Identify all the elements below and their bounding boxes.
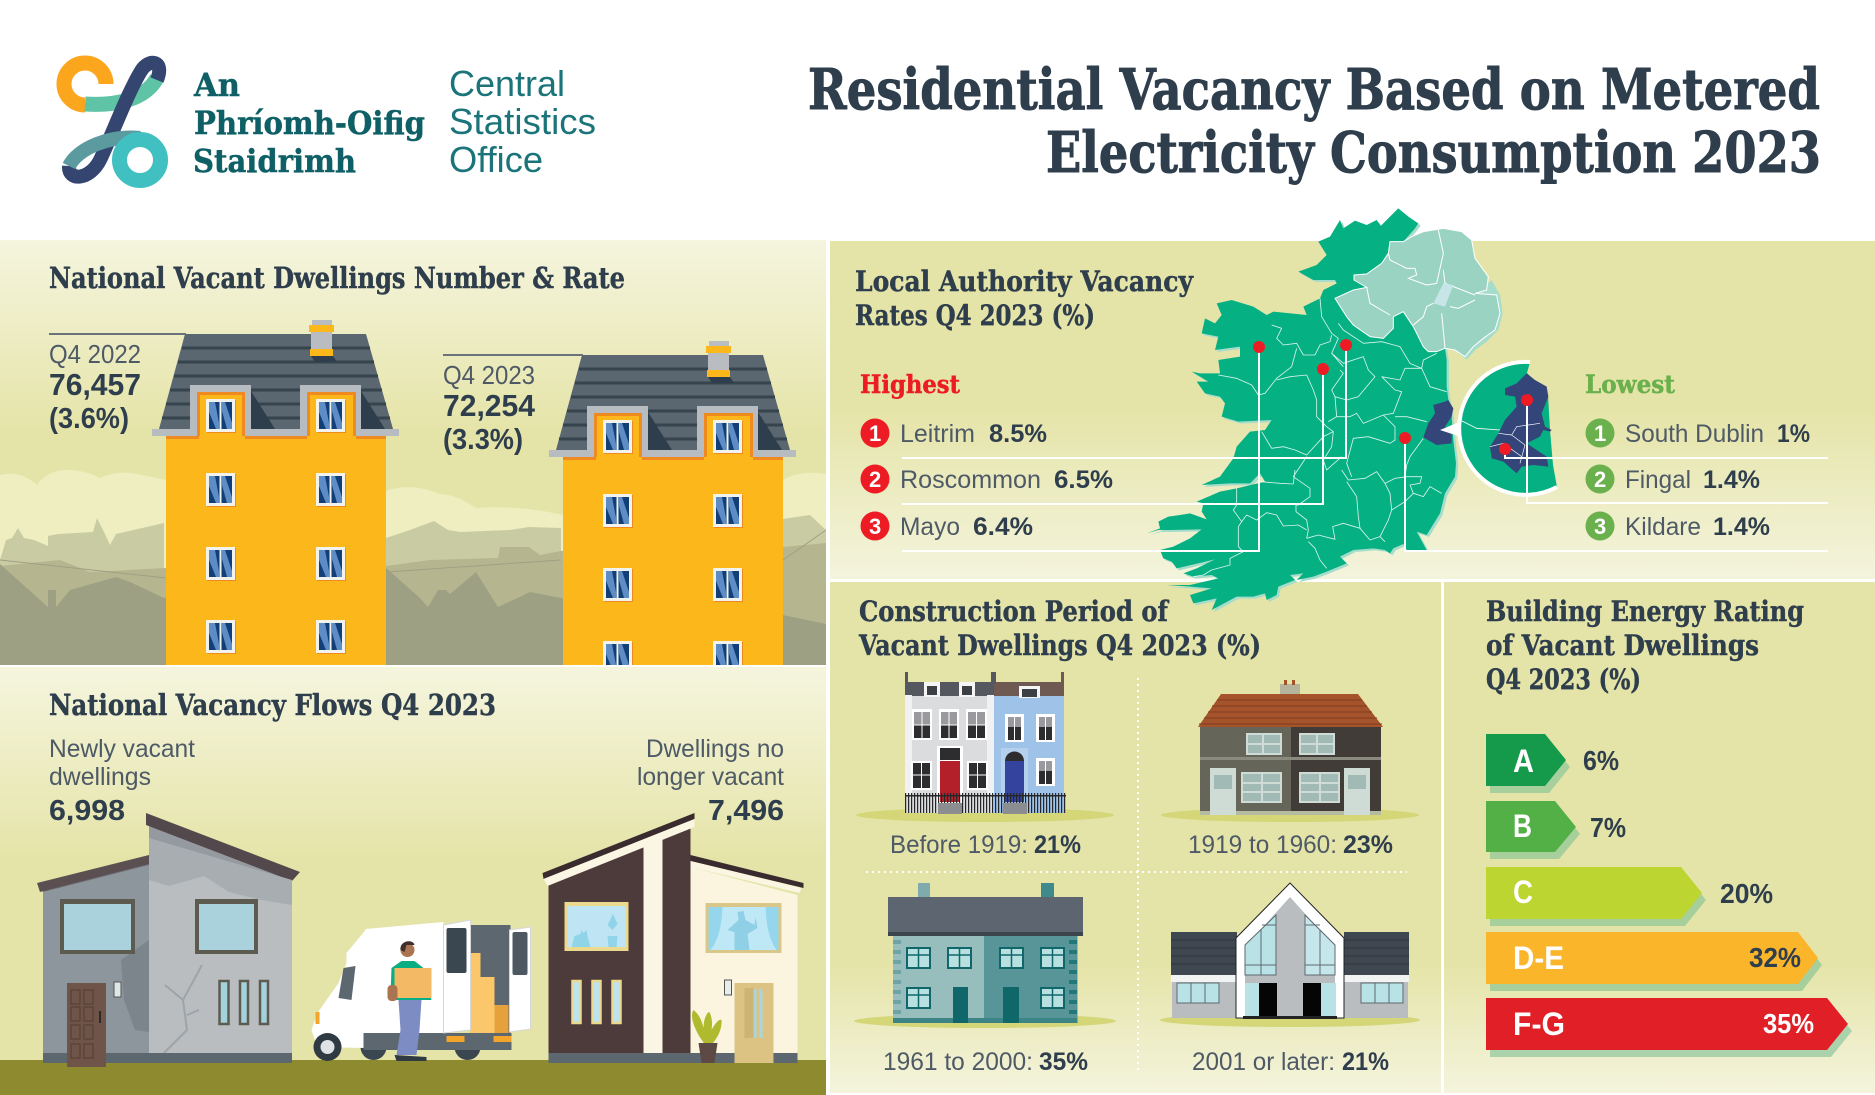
bar: rating D-E: 32%	[1749, 942, 1801, 973]
panel: construction period	[830, 582, 1441, 1093]
rank 1 South Dublin	[1586, 418, 1810, 448]
leader lines and map pins	[902, 339, 1828, 551]
stat: Q4 2022: (3.6%)	[49, 403, 129, 435]
heading: Local Authority Vacancy	[855, 265, 1194, 298]
rank 3 Mayo: Mayo	[900, 513, 960, 541]
rank 2 Fingal: 2	[1594, 467, 1606, 492]
heading: Building Energy Rating	[1486, 595, 1804, 628]
logo: Central Statistics Office	[64, 63, 596, 180]
house: before 1919	[856, 672, 1114, 822]
removal van with person carrying a box	[312, 920, 530, 1061]
bar: rating D-E: D-E	[1513, 940, 1564, 976]
logo Irish wordmark	[193, 66, 425, 180]
bar: rating A: A	[1513, 743, 1534, 779]
rank 2 Roscommon	[860, 464, 1113, 494]
stat: Q4 2022: Q4 2022	[49, 339, 141, 369]
house: occupied modern house	[542, 813, 804, 1063]
logo English wordmark: Office	[449, 139, 543, 180]
stat: newly vacant dwellings: dwellings	[49, 763, 151, 791]
rank 3 Mayo: 3	[869, 514, 881, 539]
rank 1 Leitrim: 8.5%	[989, 420, 1047, 448]
bar: rating B: B	[1513, 808, 1532, 844]
Northern Ireland	[1335, 228, 1503, 359]
stat: Q4 2023	[443, 355, 583, 456]
rank 3 Kildare: Kildare	[1625, 513, 1701, 541]
rank 3 Mayo: 6.4%	[973, 513, 1033, 541]
rank 2 Fingal	[1586, 464, 1760, 494]
window with person silhouette	[706, 903, 782, 953]
label: before 1919: Before 1919:	[890, 831, 1028, 859]
title	[808, 57, 1821, 186]
inset: Dublin enlarged	[1459, 362, 1557, 495]
rank 2 Fingal: Fingal	[1625, 466, 1691, 494]
building: Q4 2022	[152, 320, 399, 676]
heading: Construction Period of	[859, 595, 1170, 628]
bar: rating A	[1486, 734, 1619, 793]
bar: rating F-G: 35%	[1763, 1008, 1814, 1039]
heading: Vacant Dwellings Q4 2023 (%)	[858, 629, 1261, 662]
Dublin highlighted	[1423, 400, 1460, 445]
town skyline background	[0, 470, 826, 665]
logo English wordmark: Central	[449, 63, 565, 104]
label: before 1919: 21%	[1034, 831, 1081, 859]
heading: Q4 2023 (%)	[1486, 663, 1641, 696]
heading: National Vacancy Flows Q4 2023	[49, 688, 496, 722]
heading: National Vacant Dwellings Number & Rate	[49, 261, 625, 295]
panel: building energy rating	[1444, 582, 1875, 1093]
rank 3 Kildare: 1.4%	[1713, 513, 1770, 541]
stat: dwellings no longer vacant: Dwellings no	[646, 735, 784, 763]
label: 2001 or later: 2001 or later:	[1192, 1048, 1335, 1076]
rank 1 South Dublin: South Dublin	[1625, 420, 1764, 448]
stat: newly vacant dwellings	[49, 735, 195, 827]
stat: Q4 2023: (3.3%)	[443, 424, 523, 456]
bar: rating C	[1486, 867, 1773, 926]
rank 2 Fingal: 1.4%	[1703, 466, 1760, 494]
label: 2001 or later: 21%	[1342, 1048, 1389, 1076]
logo English wordmark	[449, 63, 596, 180]
bar: rating A: 6%	[1583, 745, 1619, 776]
rank 2 Roscommon: 6.5%	[1054, 466, 1113, 494]
stat: dwellings no longer vacant	[637, 735, 784, 827]
stat: Q4 2022: 76,457	[49, 367, 141, 402]
highest list: Highest	[860, 370, 960, 399]
bar: rating C: 20%	[1720, 878, 1773, 909]
heading	[855, 265, 1194, 332]
rank 3 Mayo	[860, 512, 1033, 541]
label: 1961 to 2000: 1961 to 2000:	[883, 1048, 1033, 1076]
rank 1 Leitrim	[860, 418, 1047, 448]
house: vacant grey house	[37, 813, 300, 1067]
bar: rating F-G	[1486, 998, 1852, 1057]
heading	[858, 595, 1261, 662]
stat: newly vacant dwellings: Newly vacant	[49, 735, 195, 763]
logo English wordmark: Statistics	[449, 101, 596, 142]
logo Irish wordmark: Phríomh-Oifig	[194, 104, 425, 142]
lowest list	[1585, 370, 1810, 541]
rank 2 Roscommon: 2	[869, 467, 881, 492]
rank 1 Leitrim: Leitrim	[900, 420, 975, 448]
rank 1 South Dublin: 1%	[1777, 420, 1810, 448]
bar: rating C: C	[1513, 874, 1533, 910]
logo Irish wordmark: Staidrimh	[193, 142, 356, 180]
house: 2001 or later	[1160, 883, 1420, 1027]
heading: of Vacant Dwellings	[1486, 629, 1759, 662]
stat: dwellings no longer vacant: longer vacant	[637, 763, 784, 791]
panel: national vacancy flows	[0, 667, 826, 1095]
stat: dwellings no longer vacant: 7,496	[708, 795, 784, 827]
label: 1919 to 1960: 1919 to 1960:	[1188, 831, 1337, 859]
panel: local authority vacancy rates	[830, 208, 1875, 612]
bar: rating F-G: F-G	[1513, 1006, 1565, 1042]
bar: rating B	[1486, 801, 1626, 859]
potted plant	[692, 1010, 722, 1063]
highest list	[860, 370, 1113, 541]
house: 1961 to 2000	[854, 883, 1116, 1028]
window with cat and plant	[564, 902, 628, 951]
bar: rating B: 7%	[1590, 812, 1626, 843]
panel: national vacant dwellings number and rate	[0, 240, 826, 697]
heading	[1486, 595, 1804, 696]
rank 2 Roscommon: Roscommon	[900, 466, 1041, 494]
stat: Q4 2023: Q4 2023	[443, 360, 535, 390]
bar: rating D-E	[1486, 932, 1822, 991]
ground	[0, 1060, 826, 1095]
map of Ireland	[1147, 208, 1503, 612]
label: 1919 to 1960: 23%	[1343, 831, 1393, 859]
label: 1961 to 2000: 35%	[1039, 1048, 1088, 1076]
stat: newly vacant dwellings: 6,998	[49, 795, 125, 827]
lowest list: Lowest	[1585, 370, 1675, 399]
logo symbol	[64, 63, 160, 180]
stat: Q4 2022	[49, 334, 186, 435]
rank 1 South Dublin: 1	[1594, 421, 1606, 446]
heading: Rates Q4 2023 (%)	[855, 299, 1095, 332]
stat: Q4 2023: 72,254	[443, 388, 536, 423]
building: Q4 2023	[549, 341, 796, 697]
rank 1 Leitrim: 1	[869, 421, 881, 446]
county boundaries	[1193, 298, 1447, 577]
rank 3 Kildare: 3	[1594, 514, 1606, 539]
house: 1919 to 1960	[1161, 680, 1419, 822]
logo Irish wordmark: An	[193, 66, 240, 104]
rank 3 Kildare	[1586, 512, 1770, 541]
